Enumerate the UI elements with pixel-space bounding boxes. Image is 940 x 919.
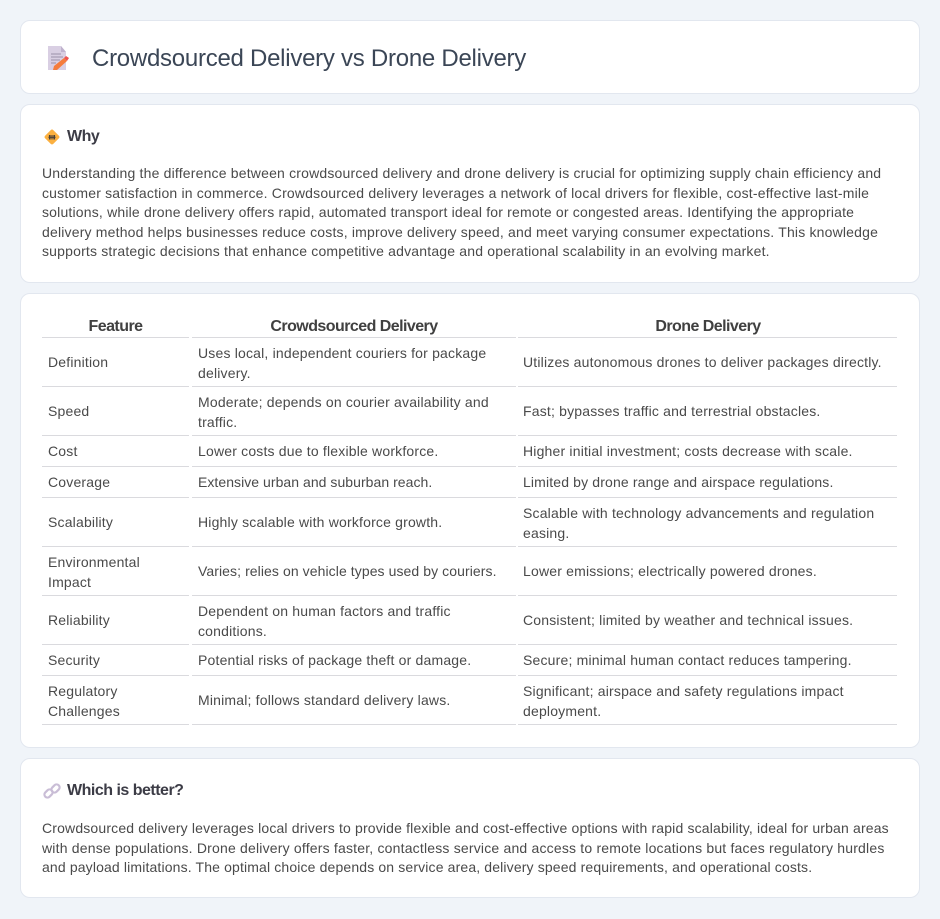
comparison table xyxy=(42,318,897,725)
comparison table: Cost xyxy=(48,443,78,459)
comparison table: Higher initial investment; costs decrease with scale. xyxy=(523,443,853,459)
comparison table: Potential risks of package theft or damage. xyxy=(198,652,471,668)
table header row xyxy=(89,318,761,335)
table header row: Drone Delivery xyxy=(655,318,761,335)
comparison table: Significant; airspace and safety regulations impact xyxy=(523,683,844,699)
table header row: Feature xyxy=(89,318,142,335)
text block: why paragraph xyxy=(42,165,881,259)
comparison table: conditions. xyxy=(198,623,267,639)
comparison table: Consistent; limited by weather and technical issues. xyxy=(523,612,853,628)
panel: header xyxy=(20,20,920,94)
comparison table: Environmental xyxy=(48,554,140,570)
comparison table: Scalable with technology advancements and regulation xyxy=(523,505,874,521)
comparison table: Security xyxy=(48,652,100,668)
comparison table: Utilizes autonomous drones to deliver packages directly. xyxy=(523,354,882,370)
comparison table: Impact xyxy=(48,574,91,590)
panel: comparison table xyxy=(20,293,920,748)
text block: why paragraph: solutions, while drone delivery offers rapid, automated transport ideal for remote or congested areas. Identifying the appropriate xyxy=(42,204,854,220)
comparison table: Speed xyxy=(48,403,89,419)
comparison table: Varies; relies on vehicle types used by couriers. xyxy=(198,563,497,579)
heading: which is better: Which is better? xyxy=(67,782,183,799)
text block: why paragraph: delivery method helps businesses reduce costs, improve delivery speed, and meet varying consumer expectations. This knowledge xyxy=(42,224,878,240)
comparison table: Lower emissions; electrically powered drones. xyxy=(523,563,817,579)
text block: why paragraph: Understanding the difference between crowdsourced delivery and drone delivery is crucial for optimizing supply chain efficiency and xyxy=(42,165,881,181)
comparison table: Dependent on human factors and traffic xyxy=(198,603,451,619)
comparison table: Moderate; depends on courier availability and xyxy=(198,394,489,410)
text block: which is better paragraph: and payload limitations. The optimal choice depends on service area, delivery speed requirements, and operational costs. xyxy=(42,859,812,875)
text block: why paragraph: supports strategic decisions that enhance competitive advantage and operational scalability in an evolving market. xyxy=(42,243,770,259)
comparison table: Definition xyxy=(48,354,108,370)
comparison table: delivery. xyxy=(198,365,251,381)
text block: which is better paragraph: Crowdsourced delivery leverages local drivers to provide flexible and cost-effective options with rapid scalability, ideal for urban areas xyxy=(42,820,889,836)
heading: why: Why xyxy=(67,128,99,145)
comparison table: easing. xyxy=(523,525,569,541)
text block: why paragraph: customer satisfaction in commerce. Crowdsourced delivery leverages a network of local drivers for flexible, cost-effective last-mile xyxy=(42,185,869,201)
comparison table: Coverage xyxy=(48,474,110,490)
comparison table: Minimal; follows standard delivery laws. xyxy=(198,692,450,708)
panel: why xyxy=(20,104,920,283)
comparison table: deployment. xyxy=(523,703,601,719)
comparison table: Uses local, independent couriers for package xyxy=(198,345,486,361)
comparison table: Highly scalable with workforce growth. xyxy=(198,514,442,530)
text block: which is better paragraph: with dense populations. Drone delivery offers faster, contactless service and access to remote locations but faces regulatory hurdles xyxy=(42,840,885,856)
icon: chain link xyxy=(43,783,61,799)
comparison table: Lower costs due to flexible workforce. xyxy=(198,443,438,459)
icon: diamond warning sign xyxy=(44,130,60,144)
title: Crowdsourced Delivery vs Drone Delivery xyxy=(92,45,526,72)
comparison table: Secure; minimal human contact reduces tampering. xyxy=(523,652,852,668)
comparison table: Challenges xyxy=(48,703,120,719)
table header row: Crowdsourced Delivery xyxy=(270,318,438,335)
text block: which is better paragraph xyxy=(42,820,889,875)
panel: which is better xyxy=(20,758,920,898)
comparison table: Scalability xyxy=(48,514,113,530)
icon: document with pencil xyxy=(48,46,69,70)
comparison table: Fast; bypasses traffic and terrestrial obstacles. xyxy=(523,403,820,419)
comparison table: traffic. xyxy=(198,414,237,430)
comparison table: Extensive urban and suburban reach. xyxy=(198,474,432,490)
comparison table: Reliability xyxy=(48,612,110,628)
comparison table: Regulatory xyxy=(48,683,118,699)
comparison table: Limited by drone range and airspace regulations. xyxy=(523,474,833,490)
